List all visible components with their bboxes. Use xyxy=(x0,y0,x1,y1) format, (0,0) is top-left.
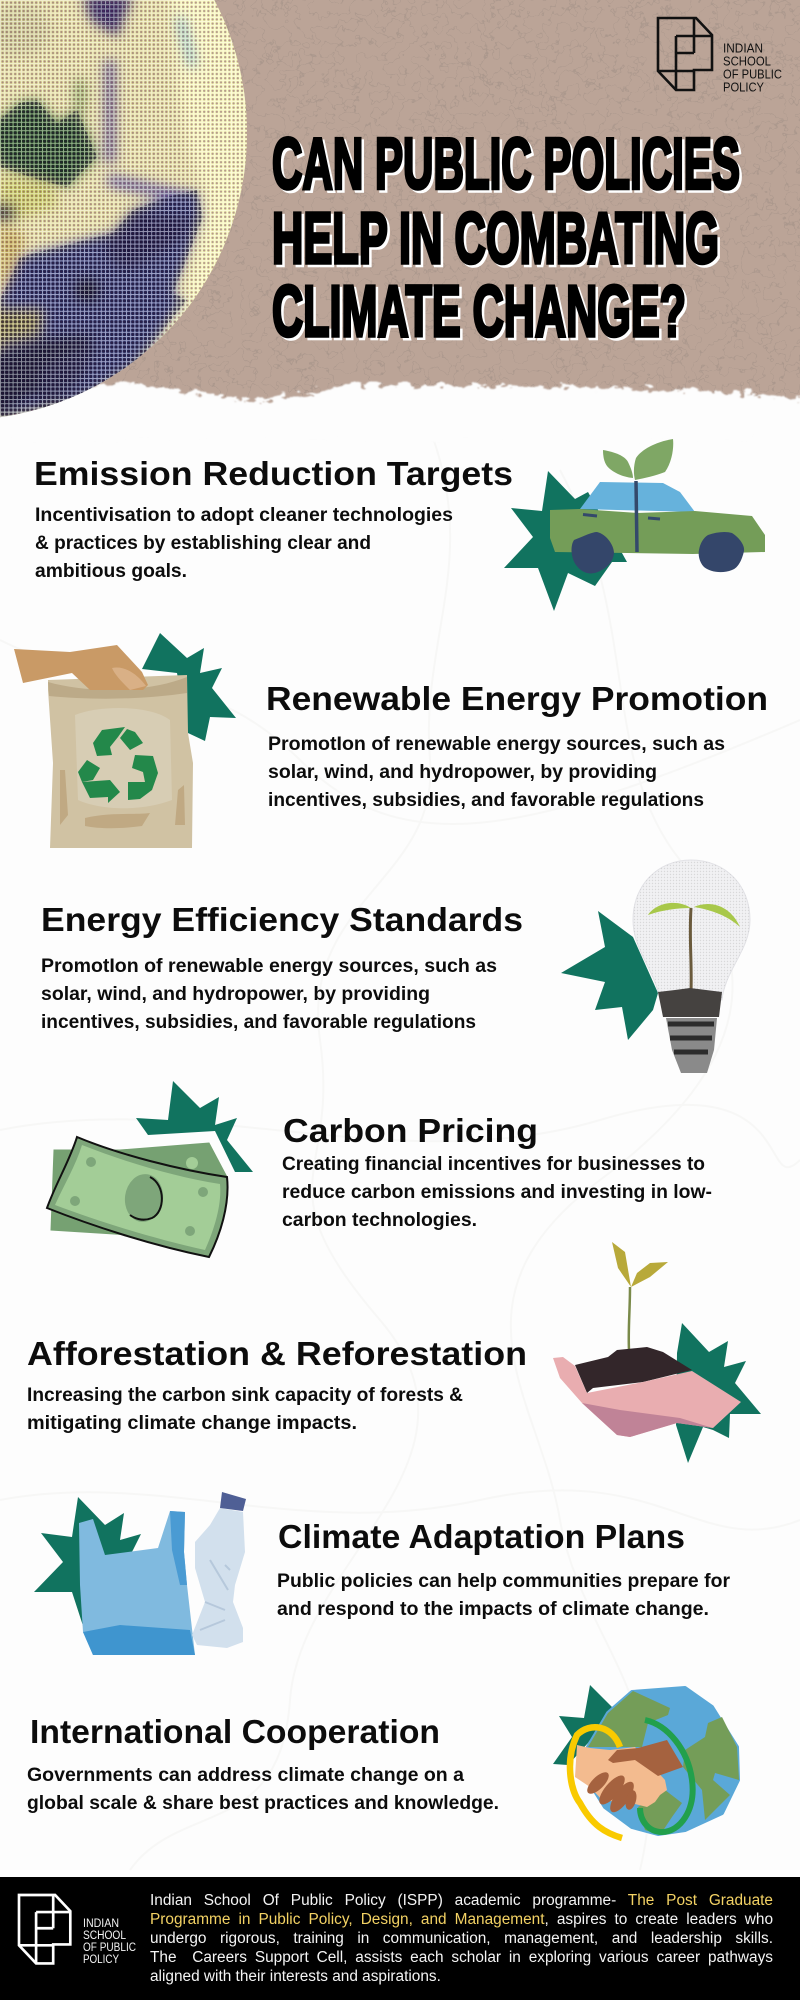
body text: Public policies can help communities prepare for xyxy=(277,1571,731,1592)
body text: reduce carbon emissions and investing in low- xyxy=(282,1182,712,1203)
dark hand xyxy=(608,1740,683,1776)
icon: plant in light bulb xyxy=(561,860,750,1073)
section: climate adaptation plans xyxy=(277,1518,731,1620)
heading: Climate Adaptation Plans xyxy=(278,1518,685,1555)
logo mark xyxy=(658,18,712,90)
soil xyxy=(575,1347,692,1393)
light hand xyxy=(575,1745,667,1807)
icon: handshake over globe xyxy=(553,1685,739,1838)
body text xyxy=(27,1765,499,1814)
teal star xyxy=(561,911,658,1040)
footer logo wordmark: INDIAN xyxy=(83,1918,119,1930)
teal star xyxy=(136,1081,253,1172)
leaves xyxy=(603,450,633,478)
car windows xyxy=(580,482,695,512)
body text: Governments can address climate change on a xyxy=(27,1765,464,1786)
logo wordmark: SCHOOL xyxy=(723,54,771,68)
heading: International Cooperation xyxy=(30,1713,440,1750)
body text: incentives, subsidies, and favorable regulations xyxy=(268,790,704,811)
body text xyxy=(277,1571,731,1620)
teal star xyxy=(676,1323,761,1463)
icon: plastic bag and bottle xyxy=(34,1492,246,1655)
screw base xyxy=(666,1018,717,1073)
banknote seal xyxy=(122,1172,166,1224)
door line xyxy=(636,481,637,552)
icon: seedling in hand xyxy=(553,1242,761,1463)
glass bulb xyxy=(633,860,750,1000)
body text xyxy=(41,956,497,1033)
logo wordmark: OF PUBLIC xyxy=(723,68,782,82)
corner dots xyxy=(70,1157,208,1236)
wheels xyxy=(572,532,614,573)
section: afforestation and reforestation xyxy=(27,1335,527,1434)
footer paragraph: undergo rigorous, training in communication, management, and leadership skills. xyxy=(150,1930,773,1947)
section: renewable energy promotion xyxy=(266,680,768,811)
bag xyxy=(48,675,193,848)
teal star xyxy=(553,1685,612,1765)
body text: global scale & share best practices and knowledge. xyxy=(27,1793,499,1814)
body text: Increasing the carbon sink capacity of forests & xyxy=(27,1385,463,1406)
icon: recycling bag held by hand xyxy=(14,633,236,848)
section: emission reduction targets xyxy=(34,455,513,582)
body text: solar, wind, and hydropower, by providing xyxy=(41,984,430,1005)
section: carbon pricing xyxy=(282,1112,712,1231)
footer logo wordmark: OF PUBLIC xyxy=(83,1942,136,1954)
hand xyxy=(553,1357,741,1437)
logo wordmark xyxy=(723,42,782,94)
logo wordmark: POLICY xyxy=(723,80,765,94)
hand xyxy=(14,645,148,690)
body text xyxy=(35,505,453,582)
title xyxy=(272,124,742,354)
icon: banknotes xyxy=(47,1081,253,1257)
body text xyxy=(282,1154,712,1231)
footer paragraph: Indian School Of Public Policy (ISPP) academic programme- The Post Graduate xyxy=(150,1892,773,1909)
body text: mitigating climate change impacts. xyxy=(27,1413,357,1434)
footer logo wordmark: SCHOOL xyxy=(83,1930,127,1942)
green arrow xyxy=(640,1720,693,1832)
front banknote xyxy=(47,1137,228,1257)
body text: ambitious goals. xyxy=(35,561,187,582)
footer paragraph: aligned with their interests and aspirations. xyxy=(150,1968,441,1985)
heading: Energy Efficiency Standards xyxy=(41,901,523,938)
heading: Afforestation & Reforestation xyxy=(27,1335,527,1372)
heading: Carbon Pricing xyxy=(283,1112,538,1149)
sprout stem xyxy=(689,908,693,992)
body text xyxy=(268,734,725,811)
body text: & practices by establishing clear and xyxy=(35,533,371,554)
footer panel xyxy=(0,1877,800,2000)
section: energy efficiency standards xyxy=(41,901,523,1033)
sprout leaves xyxy=(648,903,691,915)
footer paragraph: The Careers Support Cell, assists each scholar in exploring various career pathways xyxy=(150,1949,773,1966)
footer logo mark xyxy=(19,1895,70,1963)
teal star xyxy=(504,471,627,611)
soil xyxy=(658,988,722,1017)
back banknote xyxy=(51,1143,227,1240)
teal star xyxy=(142,633,236,741)
teal star xyxy=(34,1497,141,1632)
footer logo wordmark: POLICY xyxy=(83,1954,119,1966)
logo: top right xyxy=(658,18,782,94)
body text: solar, wind, and hydropower, by providing xyxy=(268,762,657,783)
body text: Creating financial incentives for businesses to xyxy=(282,1154,705,1175)
header panel: paper texture xyxy=(0,0,800,440)
heading: Emission Reduction Targets xyxy=(34,455,513,492)
body text: PromotIon of renewable energy sources, such as xyxy=(268,734,725,755)
land xyxy=(588,1691,739,1835)
globe xyxy=(588,1688,738,1834)
icon: car with leaves xyxy=(504,439,765,611)
body text: Incentivisation to adopt cleaner technologies xyxy=(35,505,453,526)
seedling stem xyxy=(629,1287,630,1350)
logo wordmark: INDIAN xyxy=(723,42,763,56)
plastic bag xyxy=(79,1511,195,1655)
halftone globe xyxy=(0,0,260,430)
heading: Renewable Energy Promotion xyxy=(266,680,768,717)
footer paragraph xyxy=(150,1892,773,1985)
section: international cooperation xyxy=(27,1713,499,1814)
yellow arrow xyxy=(570,1727,622,1838)
body text xyxy=(27,1385,463,1434)
body text: carbon technologies. xyxy=(282,1210,477,1231)
car body xyxy=(550,509,765,554)
seedling leaves xyxy=(612,1242,631,1287)
body text: and respond to the impacts of climate change. xyxy=(277,1599,709,1620)
plastic bottle xyxy=(192,1508,245,1648)
footer logo wordmark xyxy=(83,1918,136,1966)
body text: incentives, subsidies, and favorable regulations xyxy=(41,1012,476,1033)
recycling symbol xyxy=(78,727,158,803)
footer paragraph: Programme in Public Policy, Design, and Management, aspires to create leaders who xyxy=(150,1911,773,1928)
body text: PromotIon of renewable energy sources, such as xyxy=(41,956,497,977)
